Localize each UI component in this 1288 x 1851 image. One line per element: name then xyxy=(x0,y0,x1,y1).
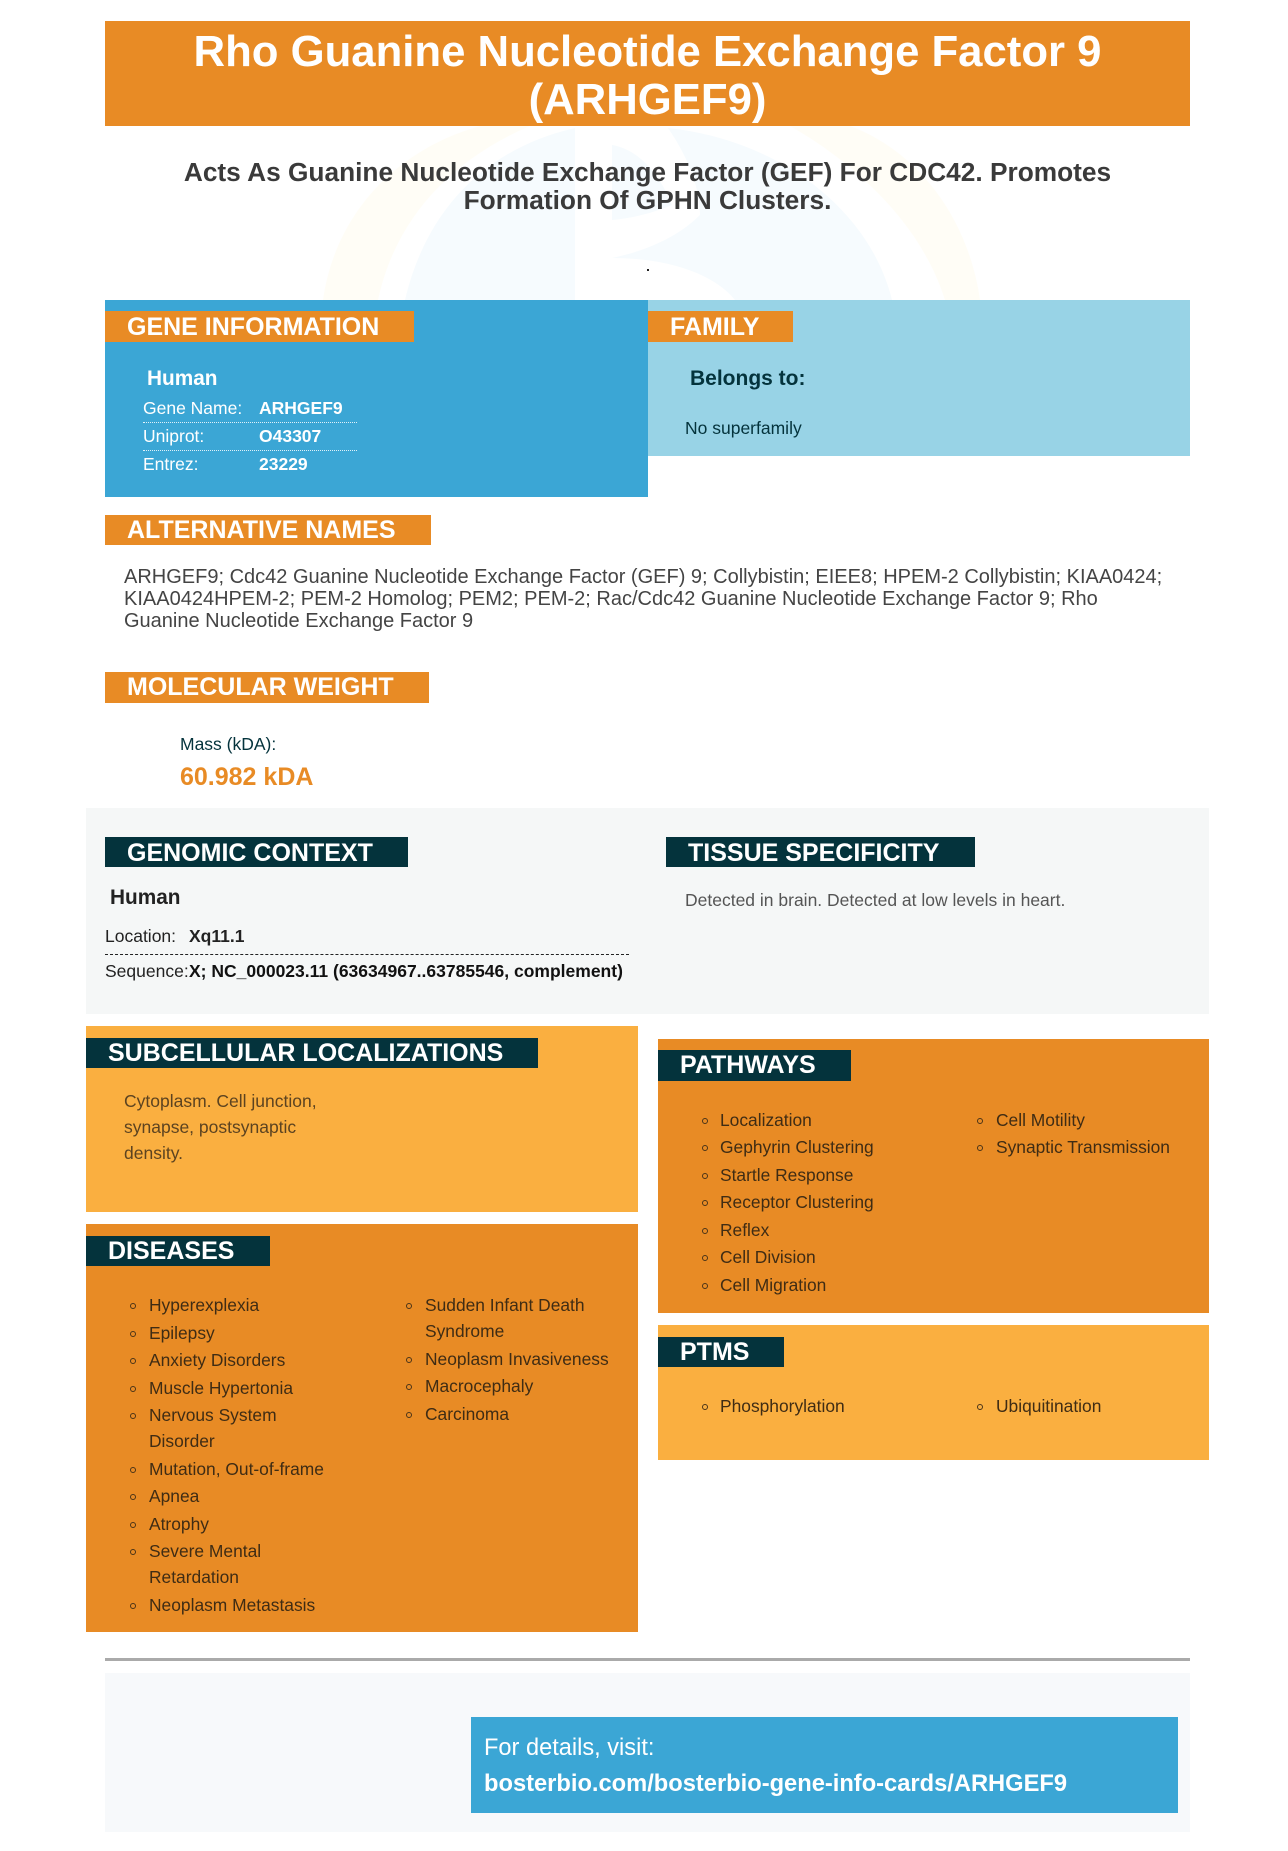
panel: genomic context and tissue specificity xyxy=(86,808,1209,1014)
pathway list: Localization xyxy=(720,1110,812,1130)
entrez row: 23229 xyxy=(259,454,308,474)
gene name row: Gene Name: xyxy=(143,398,242,418)
heading: molecular weight: MOLECULAR WEIGHT xyxy=(127,673,394,701)
disease list: Syndrome xyxy=(425,1321,504,1341)
disease list: Mutation, Out-of-frame xyxy=(149,1459,324,1479)
alternative names text: ARHGEF9; Cdc42 Guanine Nucleotide Exchange Factor (GEF) 9; Collybistin; EIEE8; HPEM-2 Collybistin; KIAA0424; xyxy=(124,566,1162,588)
location row: Location: xyxy=(105,926,176,946)
heading: gene information: GENE INFORMATION xyxy=(127,313,379,341)
title banner: Rho Guanine Nucleotide Exchange Factor 9 xyxy=(194,27,1101,76)
disease list: Epilepsy xyxy=(149,1323,215,1343)
entrez row xyxy=(143,454,308,474)
heading: ptms xyxy=(658,1337,784,1367)
disease list: Macrocephaly xyxy=(425,1376,533,1396)
panel: footer xyxy=(105,1673,1190,1832)
sequence row: Sequence: xyxy=(105,961,189,981)
uniprot row: Uniprot: xyxy=(143,426,204,446)
species label: Human xyxy=(110,886,180,909)
panel: ptms xyxy=(658,1325,1209,1460)
disease list: Carcinoma xyxy=(425,1404,509,1424)
title banner: (ARHGEF9) xyxy=(529,75,766,124)
subtitle: Formation Of GPHN Clusters. xyxy=(464,185,831,215)
panel: genomic context and tissue specificity: Xq11.1 xyxy=(189,926,244,946)
heading: diseases: DISEASES xyxy=(108,1237,234,1265)
disease list: Nervous System xyxy=(149,1405,277,1425)
disease list: Disorder xyxy=(149,1431,215,1451)
disease list xyxy=(130,1295,609,1615)
panel: family xyxy=(648,300,1190,456)
species label: Human xyxy=(147,367,217,390)
panel: pathways xyxy=(658,1039,1209,1313)
localization text xyxy=(124,1091,317,1163)
panel: genomic context and tissue specificity: X; NC_000023.11 (63634967..63785546, complement) xyxy=(189,961,623,981)
visit label: For details, visit: xyxy=(484,1735,654,1761)
heading: diseases xyxy=(86,1236,270,1266)
ptm list xyxy=(702,1396,1101,1416)
title banner xyxy=(105,21,1190,126)
disease list: Neoplasm Invasiveness xyxy=(425,1349,609,1369)
alternative names text: KIAA0424HPEM-2; PEM-2 Homolog; PEM2; PEM-2; Rac/Cdc42 Guanine Nucleotide Exchange Factor 9; Rho xyxy=(124,588,1098,610)
localization text: Cytoplasm. Cell junction, xyxy=(124,1091,317,1111)
alternative names text xyxy=(124,566,1162,632)
disease list: Sudden Infant Death xyxy=(425,1295,585,1315)
uniprot row xyxy=(143,426,321,446)
heading: pathways: PATHWAYS xyxy=(680,1051,816,1079)
url: bosterbio.com/bosterbio-gene-info-cards/ARHGEF9 xyxy=(484,1771,1067,1797)
pathway list: Receptor Clustering xyxy=(720,1192,874,1212)
subtitle xyxy=(184,157,1111,215)
panel: subcellular localizations xyxy=(86,1026,638,1212)
disease list: Apnea xyxy=(149,1486,199,1506)
pathway list: Reflex xyxy=(720,1220,769,1240)
localization text: synapse, postsynaptic xyxy=(124,1117,296,1137)
mass label: Mass (kDA): xyxy=(180,734,276,754)
disease list: Anxiety Disorders xyxy=(149,1350,285,1370)
mass value: 60.982 kDA xyxy=(180,763,313,791)
background watermark logo xyxy=(323,126,980,300)
tissue specificity text: Detected in brain. Detected at low levels in heart. xyxy=(685,890,1065,910)
entrez row: Entrez: xyxy=(143,454,198,474)
belongs to label: Belongs to: xyxy=(690,367,806,390)
disease list: Hyperexplexia xyxy=(149,1295,259,1315)
ptm list: Phosphorylation xyxy=(720,1396,845,1416)
heading: alternative names: ALTERNATIVE NAMES xyxy=(127,516,396,544)
disease list: Severe Mental xyxy=(149,1541,261,1561)
family value: No superfamily xyxy=(685,418,802,438)
alternative names text: Guanine Nucleotide Exchange Factor 9 xyxy=(124,610,473,632)
sequence row xyxy=(105,961,623,981)
disease list: Atrophy xyxy=(149,1514,209,1534)
heading: family: FAMILY xyxy=(670,313,759,341)
pathway list xyxy=(702,1110,1170,1295)
disease list: Retardation xyxy=(149,1567,239,1587)
callout: details link xyxy=(471,1717,1178,1813)
panel: diseases xyxy=(86,1224,638,1632)
gene name row: ARHGEF9 xyxy=(259,398,343,418)
disease list: Muscle Hypertonia xyxy=(149,1378,293,1398)
ptm list: Ubiquitination xyxy=(996,1396,1101,1416)
panel: gene information xyxy=(105,300,648,497)
uniprot row: O43307 xyxy=(259,426,321,446)
heading: genomic context: GENOMIC CONTEXT xyxy=(127,839,373,867)
subtitle: Acts As Guanine Nucleotide Exchange Factor (GEF) For CDC42. Promotes xyxy=(184,157,1111,187)
pathway list: Cell Migration xyxy=(720,1275,826,1295)
disease list: Neoplasm Metastasis xyxy=(149,1595,315,1615)
heading: subcellular localizations: SUBCELLULAR LOCALIZATIONS xyxy=(108,1039,503,1067)
heading: pathways xyxy=(658,1050,851,1081)
heading: tissue specificity: TISSUE SPECIFICITY xyxy=(688,839,939,867)
pathway list: Synaptic Transmission xyxy=(996,1137,1170,1157)
heading: family xyxy=(648,311,793,342)
pathway list: Cell Motility xyxy=(996,1110,1085,1130)
localization text: density. xyxy=(124,1143,183,1163)
dot xyxy=(647,269,649,271)
gene name row xyxy=(143,398,343,418)
location row xyxy=(105,926,244,946)
pathway list: Gephyrin Clustering xyxy=(720,1137,874,1157)
pathway list: Startle Response xyxy=(720,1165,853,1185)
heading: ptms: PTMS xyxy=(680,1338,749,1366)
pathway list: Cell Division xyxy=(720,1247,816,1267)
